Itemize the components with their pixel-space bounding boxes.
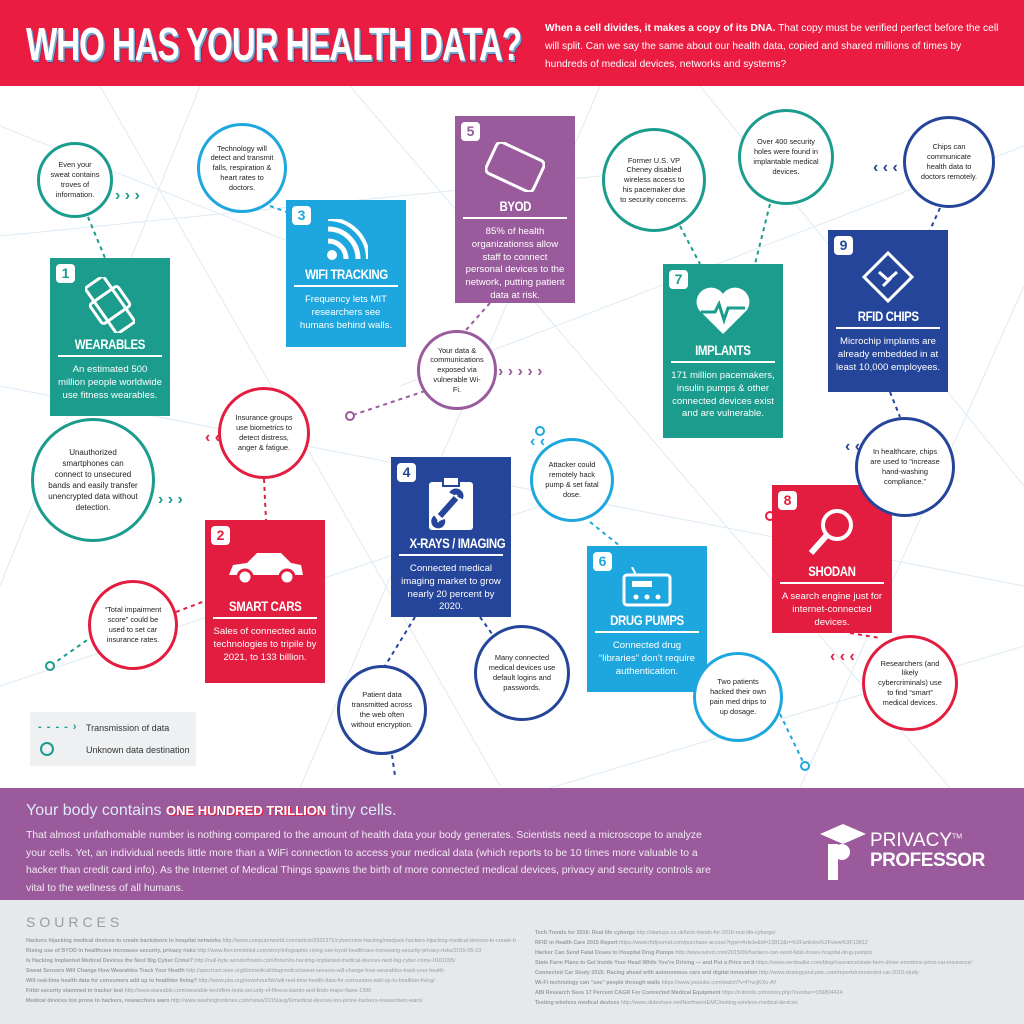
sources list left [26, 938, 516, 1004]
sources list right: Wi-Fi technology can "see" people through walls https://www.youtube.com/watch?v=PrvcjKXo-AY [535, 980, 777, 986]
callout: attacker [530, 438, 614, 522]
panel 4: x-rays [391, 457, 511, 617]
callout: patient data [337, 665, 427, 755]
callout: many connected: Many connected medical devices use default logins and passwords. [489, 653, 555, 692]
network lines: › › › [158, 491, 183, 508]
network lines: ‹ ‹ ‹ [845, 438, 870, 455]
panel 3: wifi: WIFI TRACKING [305, 266, 387, 282]
panel 2: smart cars: 2 [217, 527, 224, 543]
header band [0, 0, 1024, 86]
icon: phone [485, 142, 545, 192]
panel 7: implants [663, 264, 783, 438]
panel 1: wearables: WEARABLES [75, 336, 145, 352]
panel 9: rfid [828, 230, 948, 392]
callout: total impairment: “Total impairment score” could be used to set car insurance rates. [105, 605, 161, 644]
network lines: ‹ ‹ [530, 433, 545, 450]
network lines: › › › [115, 187, 140, 204]
legend: Unknown data destination [86, 745, 190, 755]
sources list right: Hacker Can Send Fatal Doses to Hospital Drug Pumps http://www.wired.com/2015/06/hackers-can-send-fatal-doses-hospital-drug-pumps/ [535, 950, 872, 956]
panel 1: wearables: An estimated 500 million people worldwide use fitness wearables. [58, 364, 162, 401]
sources heading: SOURCES [26, 914, 123, 930]
sources list left: Fitbit security slammed in tracker test http://www.wareable.com/wearable-tech/firm-tests-security-of-fitness-bands-and-finds-major-flaws-1390 [26, 988, 371, 994]
network lines: ‹ ‹ ‹ [873, 159, 898, 176]
callout: healthcare chips [855, 417, 955, 517]
panel 3: wifi: 3 [298, 207, 305, 223]
network lines: ‹ ‹ ‹ [830, 648, 855, 665]
panel 9: rfid: Microchip implants are already embedded in at least 10,000 employees. [836, 336, 940, 373]
panel 6: drug pumps: DRUG PUMPS [610, 612, 684, 628]
sources [0, 900, 1024, 1024]
sources list right: Tech Trends for 2016: Real life cyborgs http://startups.co.uk/tech-trends-for-2016-real-life-cyborgs/ [535, 930, 775, 936]
callout: technology [197, 123, 287, 213]
panel 9: rfid: 9 [840, 237, 847, 253]
callout: sweat [37, 142, 113, 218]
body text: That almost unfathomable number is nothing compared to the amount of health data your body generates. Scientists need a microscope to analyze your cells. Yet, an individual needs little more than a WiFi connection to access your medical data (which reports to be 10 times more valuable to a hacker than credit card info). As the Internet of Medical Things spawns the birth of more connected medical devices, privacy and security controls are vital to the wellness of all humans. [26, 830, 711, 894]
callout: technology: Technology will detect and transmit falls, respiration & heart rates to doctors. [211, 144, 273, 192]
callout: total impairment [88, 580, 178, 670]
network lines [0, 86, 1024, 788]
callout: cheney [602, 128, 706, 232]
icon: watch [85, 277, 135, 333]
callout: over 400 [738, 109, 834, 205]
logo: privacy professor: PRIVACYTM [870, 830, 962, 851]
network lines: ‹ ‹ ‹ [205, 429, 230, 446]
sources list left: Rising use of BYOD in healthcare increases security, privacy risks http://www.fiercemobileit.com/story/infographic-rising-use-byod-healthcare-increasing-security-privacy-risks/2015-05-13 [26, 948, 481, 954]
panel 2: smart cars: Sales of connected auto technologies to tripile by 2021, to 133 billion. [214, 626, 316, 663]
icon: x-ray clipboard [429, 478, 473, 530]
callout: your data wifi [417, 330, 497, 410]
panel 6: drug pumps [587, 546, 707, 692]
sources list left: Will real-time health data for consumers add up to healthier living? http://www.pbs.org/newshour/bb/will-real-time-health-data-for-consumers-add-up-to-healthier-living/ [26, 978, 435, 984]
callout: cheney: Former U.S. VP Cheney disabled wireless access to his pacemaker due to security concerns. [620, 156, 688, 204]
callout: healthcare chips: In healthcare, chips are used to “increase hand-washing compliance.” [870, 447, 940, 486]
sources list left: Medical devices too prone to hackers, researchers warn http://www.washingtontimes.com/news/2015/aug/6/medical-devices-too-prone-hackers-researchers-warn/ [26, 998, 423, 1004]
logo: privacy professor [820, 824, 985, 880]
callout: chips communicate [903, 116, 995, 208]
panel 2: smart cars [205, 520, 325, 683]
panel 7: implants: IMPLANTS [695, 342, 751, 358]
network lines: › › › › › [498, 363, 542, 380]
panel 3: wifi: Frequency lets MIT researchers see humans behind walls. [300, 294, 392, 331]
callout: attacker: Attacker could remotely hack pump & set fatal dose. [545, 460, 599, 499]
bottom purple band [0, 788, 1024, 900]
panel 4: x-rays: X-RAYS / IMAGING [410, 535, 505, 551]
panel 2: smart cars: SMART CARS [229, 598, 301, 614]
sources list right: RFID in Health Care 2015 Report https://www.rfidjournal.com/purchase-access?type=Article&id=13812&r=%2Farticles%2Fview%3F13812 [535, 940, 868, 946]
icon: heart [696, 288, 750, 334]
panel 5: byod: 85% of health organizationss allow staff to connect personal devices to the network, putting patient data at risk. [465, 226, 565, 301]
callout: unauthorized: Unauthorized smartphones can connect to unsecured bands and easily transfer unencrypted data without detection. [48, 448, 138, 512]
callout: insurance: Insurance groups use biometrics to detect distress, anger & fatigue. [235, 413, 293, 452]
callout: two patients: Two patients hacked their own pain med drips to up dosage. [710, 677, 766, 716]
panel 5: byod: BYOD [499, 198, 531, 214]
panel 8: shodan: 8 [784, 492, 791, 508]
sources list right: ABI Research Sees 17 Percent CAGR For Connected Medical Equipment https://rutronik.com/story.php?number=156804424 [535, 990, 842, 996]
panel 1: wearables: 1 [62, 265, 69, 281]
panel 4: x-rays: Connected medical imaging market to grow nearly 20 percent by 2020. [401, 563, 501, 612]
sources list right [535, 930, 972, 1006]
legend [30, 712, 196, 766]
sources list right: State Farm Plans to Get Inside Your Head While You're Driving — and Put a Price on It https://www.nerdwallet.com/blog/insurance/state-farm-driver-emotions-price-car-insurance/ [535, 960, 972, 966]
sources list left: Is Hacking Implanted Medical Devices the Next Big Cyber Crime? http://null-byte.wonderhowto.com/forum/is-hacking-implanted-medical-devices-next-big-cyber-crime-0161095/ [26, 958, 455, 964]
logo: privacy professor: PROFESSOR [870, 850, 985, 871]
sources list left: Sweat Sensors Will Change How Wearables Track Your Health http://spectrum.ieee.org/biomedical/diagnostics/sweat-sensors-will-change-how-wearables-track-your-health [26, 968, 444, 974]
sources list right: Testing wireless medical devices http://www.slideshare.net/NorthwestEMC/testing-wireless-medical-devices [535, 1000, 798, 1006]
panel 7: implants: 171 million pacemakers, insulin pumps & other connected devices exist and are vulnerable. [671, 370, 775, 419]
intro text: When a cell divides, it makes a copy of its DNA. That copy must be verified perfect before the cell will split. Can we say the same about our health data, copied and shared millions of times by hundreds of medical devices, networks and systems? [545, 23, 998, 70]
callout: chips communicate: Chips can communicate health data to doctors remotely. [921, 142, 977, 181]
icon: chip [862, 251, 914, 303]
icon: car [229, 553, 303, 582]
panel 9: rfid: RFID CHIPS [858, 308, 918, 324]
title: WHO HAS YOUR HEALTH DATA? [26, 18, 521, 70]
callout: two patients [693, 652, 783, 742]
panel 1: wearables [50, 258, 170, 416]
callout: your data wifi: Your data & communications exposed via vulnerable Wi-Fi. [430, 346, 484, 394]
callout: patient data: Patient data transmitted across the web often without encryption. [351, 690, 413, 729]
sources list right: Connected Car Study 2015: Racing ahead with autonomous cars and digital innovation http://www.strategyand.pwc.com/reports/connected-car-2015-study [535, 970, 919, 976]
panel 5: byod [455, 116, 575, 303]
panel 7: implants: 7 [675, 271, 682, 287]
panel 8: shodan: SHODAN [808, 563, 856, 579]
panel 8: shodan: A search engine just for internet-connected devices. [782, 591, 882, 628]
panel 6: drug pumps: 6 [599, 553, 606, 569]
callout: researchers: Researchers (and likely cybercriminals) use to find “smart” medical devices. [878, 658, 942, 707]
icon: magnifier [808, 509, 853, 555]
legend: - - - - › [38, 721, 78, 733]
headline: Your body contains ONE HUNDRED TRILLION tiny cells. [26, 802, 397, 819]
icon: pump [622, 567, 672, 606]
callout: sweat: Even your sweat contains troves of information. [51, 160, 99, 199]
panel 6: drug pumps: Connected drug “libraries” don’t require authentication. [599, 640, 695, 677]
legend: Transmission of data [86, 723, 169, 733]
panel 3: wifi [286, 200, 406, 347]
icon: wifi [327, 219, 368, 260]
panel 4: x-rays: 4 [403, 464, 410, 480]
callout: many connected [474, 625, 570, 721]
callout: researchers [862, 635, 958, 731]
panel 8: shodan [772, 485, 892, 633]
callout: insurance [218, 387, 310, 479]
callout: over 400: Over 400 security holes were found in implantable medical devices. [753, 137, 819, 176]
callout: unauthorized [31, 418, 155, 542]
panel 5: byod: 5 [467, 123, 474, 139]
